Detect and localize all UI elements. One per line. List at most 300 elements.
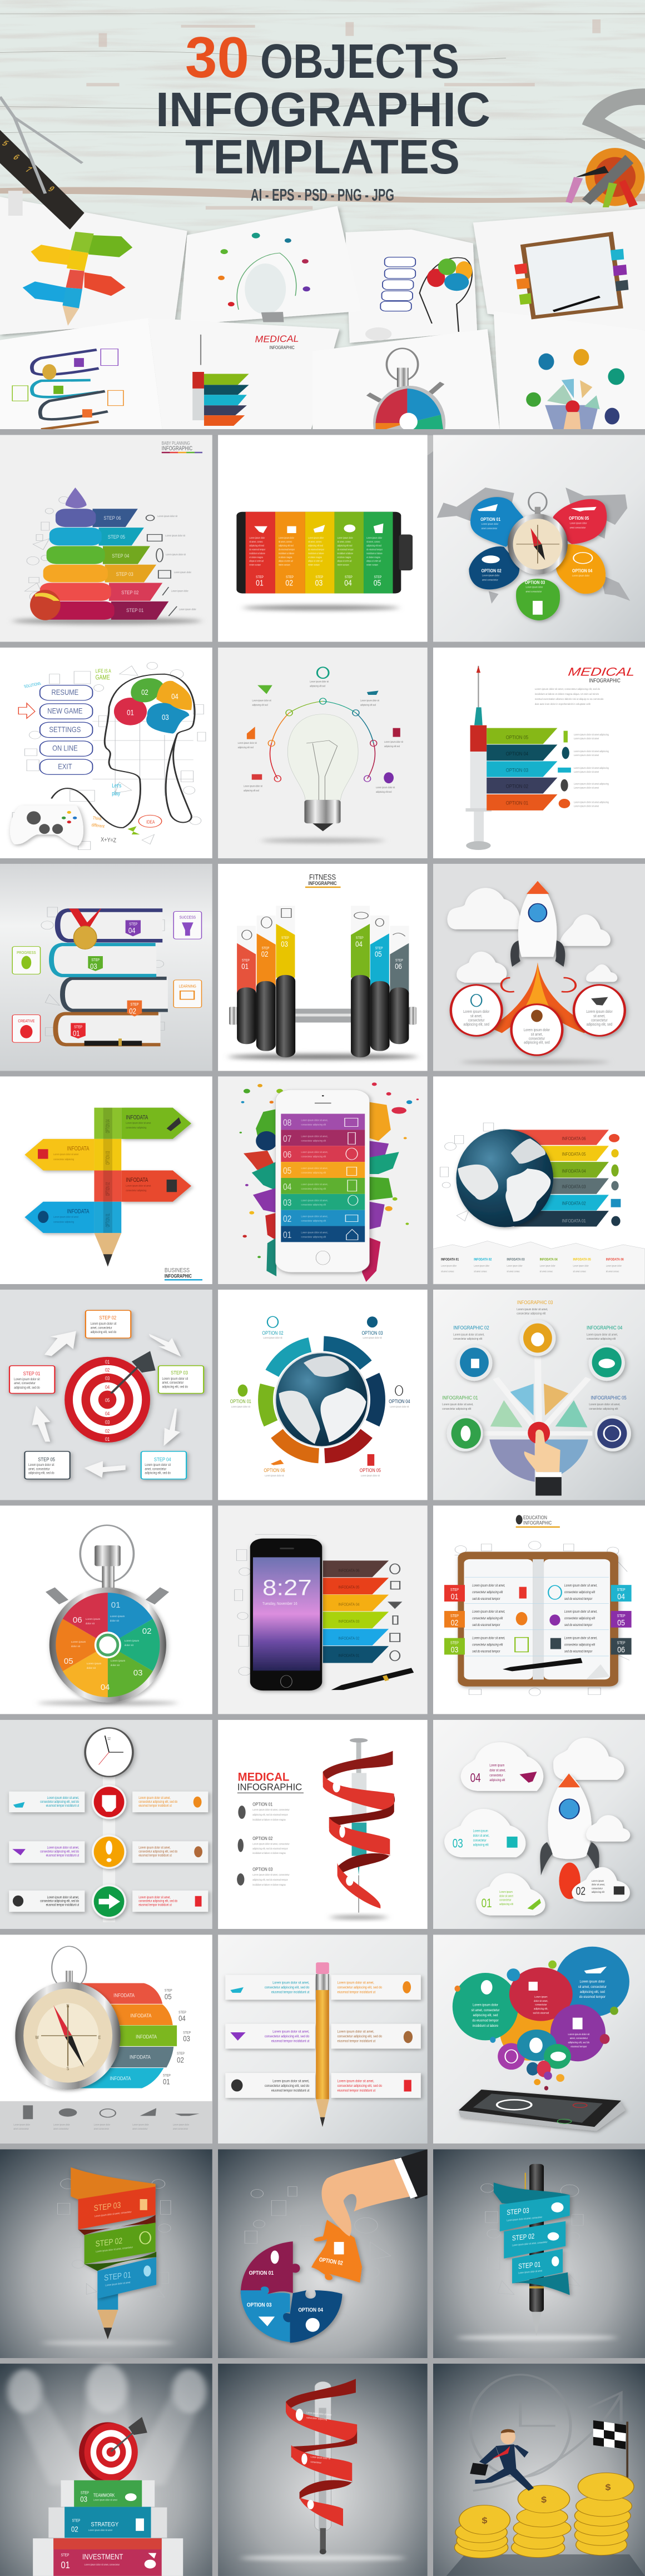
intro text: nostrud exercitation ullamco laboris nisi ut aliquip ex ea commodo [535, 698, 604, 700]
ribbon labels: STEP 02 [96, 2236, 122, 2249]
tool: ruler and compass [0, 97, 85, 230]
panel: ribbon pencil: Lorem ipsum dolor sit amet [105, 2281, 131, 2287]
paint splashes [240, 1082, 419, 1282]
heading: FITNESS [309, 872, 336, 882]
stair labels: Lorem ipsum dolor sit amet [88, 2528, 113, 2532]
panel: dart target steps: amet, consectetur [162, 1381, 183, 1385]
iphone [250, 1539, 322, 1690]
thermometer [315, 2381, 331, 2554]
tool: ruler and compass: 6 [11, 153, 22, 161]
ring segments [243, 1321, 400, 1478]
pencil: OPTION 04 [105, 1120, 111, 1133]
battery cells: incididunt ut labore [366, 551, 383, 555]
option labels: OPTION 03 [247, 2302, 271, 2309]
bars [323, 1560, 389, 1663]
panel: phone with paint splashes [218, 1076, 428, 1284]
panel: light bulb arc: Lorem ipsum dolor sit [238, 742, 257, 744]
transport footer: amet consectetur [13, 2127, 29, 2130]
panel: rocket with circles: consectetur [529, 1037, 545, 1041]
card text: eiusmod tempor incididunt ut [138, 1903, 172, 1907]
panel: medical syringe: Lorem ipsum dolor sit amet adipiscing [574, 733, 609, 736]
infodata labels: INFODATA [126, 1114, 148, 1121]
connector [103, 1774, 115, 1922]
cloud labels: 01 [482, 1897, 492, 1911]
step labels: STEP [165, 1989, 172, 1993]
step labels [163, 1989, 191, 2086]
rocket [540, 1773, 599, 1875]
footer columns [441, 1258, 624, 1262]
panel: hand pressing button: consectetur adipiscing elit [517, 1312, 546, 1316]
panel: rocket with clouds: Lorem ipsum [592, 1879, 604, 1882]
pie: Lorem ipsum [110, 1615, 125, 1618]
ribbon labels: STEP 03 [94, 2200, 121, 2213]
medal [69, 909, 101, 949]
panel: hand pressing button: Lorem ipsum dolor sit amet, [587, 1333, 618, 1337]
option labels: OPTION 02 [319, 2256, 344, 2267]
panel: globe ring arrows: Lorem ipsum dolor sit [265, 1474, 284, 1477]
card text: eiusmod tempor incididunt ut [338, 1991, 375, 1995]
panel: rocket with circles: adipiscing elit, sed [587, 1022, 613, 1027]
stair labels: INVESTMENT [82, 2552, 123, 2561]
card text: eiusmod tempor incididunt ut [271, 2089, 310, 2093]
card text: eiusmod tempor incididunt ut [46, 1854, 79, 1858]
bars: INFODATA [110, 2075, 131, 2081]
globe [456, 1129, 553, 1227]
panel: dart target steps: 02 [105, 1367, 110, 1373]
option labels: OPTION 06 [264, 1468, 285, 1473]
card text: Lorem ipsum dolor sit amet, [338, 2080, 374, 2083]
notebook text: consectetur adipiscing elit [564, 1591, 595, 1594]
panel: pencil signpost: consectetur adipiscing [126, 1126, 147, 1129]
step labels: STEP 02 [121, 589, 138, 595]
panel: game head: RESUME [52, 688, 78, 697]
battery cells: do eiusmod tempor [249, 548, 266, 551]
petal labels: OPTION 05 [569, 515, 589, 521]
step tags: 01 [73, 1028, 80, 1038]
exhaust plume [489, 962, 594, 1033]
option labels [247, 2256, 344, 2314]
panel: globe ring arrows: Lorem ipsum dolor sit [390, 1405, 409, 1408]
petal labels: OPTION 02 [482, 568, 502, 574]
bubble text: amet, consectetur [570, 2037, 588, 2040]
hero title: 30 [185, 26, 249, 90]
intro text: duis aute irure dolor in reprehenderit in voluptate velit [535, 703, 591, 705]
panel: hand pressing button: consectetur adipiscing elit [589, 1407, 618, 1411]
panel: rocket with clouds: Lorem ipsum [489, 1764, 505, 1768]
battery cells: aliqua ut enim ad [249, 559, 264, 563]
options: OPTION 03 [252, 1867, 272, 1872]
heading [162, 440, 202, 453]
battery cells: incididunt ut labore [338, 551, 354, 555]
card text: Lorem ipsum dolor sit amet, [138, 1896, 171, 1899]
battery cells: et dolore magna [366, 555, 380, 559]
panel: light bulb arc: Lorem ipsum dolor sit [384, 740, 404, 743]
panel: compass petals on world map: Lorem ipsum dolor [572, 574, 590, 577]
option labels [230, 1330, 410, 1473]
notebook text: Lorem ipsum dolor sit amet, [472, 1584, 505, 1588]
phone bars [281, 1114, 365, 1242]
transport footer [0, 2101, 212, 2144]
panel: globe with bars [433, 1076, 645, 1284]
battery cells: Lorem ipsum dolor [249, 536, 265, 539]
panel: dart target steps: adipiscing elit, sed do [145, 1471, 171, 1475]
battery cells: 03 [315, 578, 322, 588]
heading [237, 1771, 304, 1793]
infodata labels: INFODATA [126, 1177, 148, 1183]
battery cells: adipiscing elit sed [308, 544, 323, 547]
cloud labels: 03 [453, 1837, 463, 1851]
panel: businessman on coins: $ [605, 2482, 611, 2493]
bars [70, 1983, 177, 2088]
phone bars: 03 [283, 1198, 291, 1209]
option bars: OPTION 05 [506, 734, 528, 740]
coin stacks [454, 2473, 634, 2558]
panel: game head: NEW GAME [47, 706, 83, 715]
pie: 02 [142, 1627, 151, 1636]
mini: medical syringe [192, 333, 299, 426]
battery cells: aliqua ut enim ad [366, 559, 381, 563]
pie: dolor sit [125, 1644, 134, 1647]
panel: books stack: PROGRESS [17, 951, 36, 955]
battery cells: Lorem ipsum dolor [308, 536, 324, 539]
panel: light bulb arc: adipiscing elit sed [238, 746, 254, 749]
ribbon [286, 2379, 357, 2526]
panel: rocket with clouds: dolor sit amet [499, 1894, 513, 1898]
panel: fitness dumbbell: 04 [355, 939, 363, 948]
bars: INFODATA 03 [562, 1184, 586, 1190]
panel: pen with ribbon: Lorem ipsum dolor sit amet [518, 2269, 543, 2274]
panel: education notebook: STEP [450, 1614, 459, 1618]
bubble text: sit amet, consectetur [578, 1985, 607, 1989]
heading: INFOGRAPHIC [162, 445, 192, 452]
doodle notes: X+Y=Z [101, 837, 116, 844]
bubble text: sed do eiusmod [533, 2011, 549, 2015]
option labels: OPTION 01 [230, 1399, 251, 1404]
footer columns: INFODATA 06 [606, 1258, 624, 1262]
card text: eiusmod tempor incididunt ut [271, 2040, 310, 2043]
panel: dart target steps: amet, consectetur [28, 1468, 50, 1471]
panel: rocket with clouds: dolor sit amet, [592, 1883, 605, 1886]
battery cells: adipiscing elit sed [366, 544, 381, 547]
panel: light bulb arc: adipiscing elit sed [244, 789, 260, 792]
stair labels: Lorem ipsum dolor sit amet [93, 2498, 118, 2502]
battery cells: aliqua ut enim ad [308, 559, 322, 563]
battery cells: do eiusmod tempor [308, 548, 325, 551]
pencil: OPTION 01 [105, 1214, 111, 1227]
panel: light bulb arc: Lorem ipsum dolor sit [252, 699, 271, 702]
petal labels: OPTION 04 [572, 568, 593, 574]
panel: fitness dumbbell: 05 [375, 949, 382, 958]
panel: pencil signpost: Lorem ipsum dolor sit amet [53, 1153, 79, 1156]
panel: medical ribbon syringe [218, 1720, 428, 1929]
compass: W [36, 2035, 39, 2040]
infodata labels: INFODATA [67, 1209, 90, 1215]
panel: dart target steps: STEP 05 [38, 1456, 55, 1463]
battery cells: STEP [286, 576, 294, 579]
intro text: Lorem ipsum dolor sit amet, consectetur adipiscing elit, sed do [535, 688, 600, 690]
battery cells: sit amet, consec [249, 540, 263, 543]
ribbon [494, 2182, 570, 2295]
step labels [103, 515, 143, 613]
lock screen text: Tuesday, November 16 [262, 1602, 297, 1606]
mini: notebook [514, 232, 628, 319]
battery cells: et dolore magna [308, 555, 322, 559]
panel: thermometer ribbon [218, 2364, 428, 2576]
panel: fitness dumbbell: 06 [395, 962, 402, 971]
card text: consectetur adipiscing elit, sed do [265, 2085, 310, 2088]
panel: rocket with circles: sit amet, [470, 1015, 483, 1018]
options [237, 1802, 290, 1886]
heading notes: SOLUTIONS [23, 682, 42, 689]
bars: INFODATA [130, 2054, 151, 2060]
panel: education notebook: 03 [451, 1645, 458, 1654]
syringe [465, 666, 492, 850]
panel: light bulb arc: Lorem ipsum dolor sit [244, 784, 263, 788]
panel: compass petals on world map: amet consectetur [570, 526, 586, 529]
panel: medical syringe: Lorem ipsum dolor sit amet adipiscing [574, 782, 609, 785]
card text: Lorem ipsum dolor sit amet, [338, 1981, 374, 1985]
battery cells: Lorem ipsum dolor [279, 536, 294, 539]
panel: light bulb arc: adipiscing elit sed [310, 684, 326, 688]
mini: light bulb [218, 233, 310, 322]
bars: INFODATA 05 [338, 1585, 360, 1590]
notebook text: sed do eiusmod tempor [564, 1623, 593, 1627]
bubble text: incididunt ut labore [473, 2024, 499, 2028]
stair labels: STEP [81, 2491, 89, 2495]
panel: fitness dumbbell: STEP [395, 959, 403, 963]
bars: INFODATA [113, 1992, 135, 1998]
panel: rocket with clouds: adipiscing elit [473, 1843, 489, 1847]
weights [237, 975, 409, 1057]
pencil [316, 1962, 329, 2127]
card text: consectetur adipiscing elit, sed do [338, 2035, 383, 2038]
panel: dart target steps: 01 [105, 1359, 110, 1365]
ribbon labels: STEP 02 [512, 2232, 534, 2242]
heading [567, 666, 636, 684]
heading: MEDICAL [567, 666, 636, 679]
transport footer: Lorem ipsum dolor [13, 2123, 30, 2126]
cloud labels: 02 [576, 1884, 586, 1897]
intro text: incididunt ut labore et dolore magna aliqua. Ut enim ad minim [535, 693, 599, 695]
phone bars: consectetur adipiscing elit [301, 1171, 326, 1174]
panel: dart target steps: Lorem ipsum dolor sit [145, 1463, 171, 1467]
infographic labels: INFOGRAPHIC 04 [587, 1325, 623, 1331]
stair labels: TEAMWORK [93, 2493, 115, 2498]
panel: compass petals on world map: Lorem ipsum dolor [482, 574, 500, 577]
panel: rocket with clouds: consectetur [473, 1839, 487, 1843]
step tags: STEP [91, 958, 100, 962]
bars: INFODATA 04 [338, 1603, 360, 1607]
infodata labels: INFODATA [67, 1146, 90, 1152]
battery cells: sit amet, consec [366, 540, 380, 543]
battery cells: adipiscing elit sed [338, 544, 352, 547]
panel: rocket with circles: Lorem ipsum dolor [524, 1028, 550, 1032]
panel: education notebook: 05 [617, 1618, 625, 1627]
panel: compass with bars [0, 1935, 212, 2144]
crown [50, 1525, 165, 1602]
pie: Lorem ipsum [71, 1640, 86, 1643]
panel: baby planning stack: Lorem ipsum dolor [171, 589, 188, 593]
intro text [535, 688, 604, 705]
card text: Lorem ipsum dolor sit amet, [138, 1797, 171, 1800]
panel: dart target steps: adipiscing elit, sed do [14, 1386, 40, 1390]
panel: rocket with clouds: consectetur [499, 1898, 512, 1902]
notebook text: Lorem ipsum dolor sit amet, [564, 1610, 597, 1614]
bubble text: adipiscing elit, sed [580, 1990, 605, 1994]
options: OPTION 01 [252, 1802, 272, 1807]
ribbon: consectetur adipiscing [306, 2416, 328, 2421]
hero title: TEMPLATES [185, 130, 460, 184]
infographic labels: INFOGRAPHIC 02 [453, 1325, 489, 1331]
doodle notes: play [112, 790, 121, 797]
card text: Lorem ipsum dolor sit amet, [47, 1797, 79, 1800]
spokes [483, 1353, 592, 1434]
infographic labels [442, 1299, 627, 1401]
panel: dart target steps: adipiscing elit, sed do [91, 1331, 116, 1334]
phone bars: Lorem ipsum dolor sit amet, [301, 1199, 328, 1202]
panel: fitness dumbbell: STEP [242, 959, 250, 963]
panel: rocket with circles [433, 864, 645, 1071]
option buttons [446, 1320, 631, 1451]
hero title [156, 26, 490, 184]
panel: rocket with clouds: Lorem ipsum [499, 1890, 513, 1894]
bubbles [453, 1947, 629, 2090]
panel: medical syringe [433, 648, 645, 858]
option labels: OPTION 02 [262, 1330, 284, 1336]
heading: MEDICAL [238, 1771, 290, 1784]
tool: protractor [582, 88, 645, 150]
heading: INFOGRAPHIC [237, 1782, 302, 1793]
head outline and cable [51, 674, 195, 828]
pie: Lorem ipsum [111, 1659, 125, 1662]
options: OPTION 02 [252, 1836, 272, 1841]
side cards [12, 911, 202, 1042]
panel: pen with ribbon [433, 2149, 645, 2358]
panel: dart target steps: 02 [105, 1429, 110, 1434]
pen [331, 1668, 414, 1690]
options: adipiscing elit, sed do eiusmod tempor [252, 1813, 288, 1816]
ribbon labels [94, 2200, 131, 2282]
bubble text: Lorem ipsum dolor sit [568, 2033, 590, 2036]
businessman [470, 2429, 534, 2491]
panel: light bulb arc: Lorem ipsum dolor sit [376, 786, 395, 789]
bubble text: adipiscing elit, sed [473, 2013, 498, 2017]
notebook text: sed do eiusmod tempor [564, 1650, 593, 1654]
panel: globe ring arrows: Lorem ipsum dolor sit [361, 1474, 380, 1477]
heading: BABY PLANNING [162, 440, 190, 446]
battery cells: STEP [315, 576, 323, 579]
panel: rocket with clouds: adipiscing elit [489, 1778, 505, 1782]
panel: rocket with clouds: consectetur [592, 1887, 603, 1889]
stair labels: STEP [61, 2553, 69, 2558]
card text: Lorem ipsum dolor sit amet, [47, 1896, 79, 1899]
bar [229, 1007, 416, 1025]
puzzle pieces [241, 2220, 362, 2343]
step labels: STEP [178, 2011, 186, 2015]
bar icons [389, 1564, 401, 1660]
option icons [558, 731, 571, 808]
transport footer: Lorem ipsum dolor [173, 2123, 190, 2126]
bars: INFODATA 06 [338, 1569, 360, 1573]
battery cells: STEP [374, 576, 381, 579]
bars: INFODATA 01 [562, 1218, 586, 1224]
battery cells: minim veniam [366, 563, 379, 566]
panel: dart target steps: Lorem ipsum dolor sit [28, 1463, 54, 1467]
panel: hand pressing button: Lorem ipsum dolor sit amet, [589, 1403, 620, 1406]
panel: education notebook: STEP [617, 1641, 626, 1645]
panel: hand pressing button: Lorem ipsum dolor sit amet, [453, 1333, 484, 1337]
panel: pencil with cards [218, 1935, 428, 2144]
battery cells: do eiusmod tempor [338, 548, 354, 551]
battery cells: Lorem ipsum dolor [338, 536, 353, 539]
battery cells [246, 512, 393, 593]
mini: pencil signpost [23, 232, 132, 326]
panel: dart target steps: 01 [105, 1436, 110, 1442]
step icons and notes [146, 515, 177, 616]
notebook text: Lorem ipsum dolor sit amet, [564, 1584, 597, 1588]
panel: baby planning stack [0, 435, 212, 641]
battery cells: 04 [344, 578, 352, 588]
syringe [330, 1738, 388, 1919]
card text: consectetur adipiscing elit, sed do [265, 2035, 310, 2038]
footer columns: INFODATA 01 [441, 1258, 459, 1262]
panel: compass petals on world map [433, 435, 645, 641]
watch case [49, 1588, 166, 1703]
panel: globe ring arrows: Lorem ipsum dolor sit [363, 1336, 382, 1339]
battery cells: incididunt ut labore [279, 551, 295, 555]
panel: rocket with clouds: Lorem ipsum [473, 1829, 488, 1833]
flag [593, 2420, 627, 2484]
bars: INFODATA 02 [338, 1637, 360, 1641]
stair labels: STEP [72, 2519, 80, 2523]
bars: INFODATA 06 [562, 1136, 586, 1141]
panel: hand pressing button: consectetur adipiscing elit [442, 1407, 472, 1411]
panel: compass petals on world map: Lorem ipsum dolor [525, 585, 543, 589]
card text: eiusmod tempor incididunt ut [46, 1804, 79, 1808]
panel: globe with bars: sit amet consec [573, 1270, 586, 1273]
footer columns: INFODATA 04 [540, 1258, 558, 1262]
notebook text: Lorem ipsum dolor sit amet, [472, 1637, 505, 1640]
panel: education notebook: STEP [450, 1588, 459, 1592]
panel: baby planning stack: Lorem ipsum dolor [179, 608, 196, 610]
pie: 06 [73, 1615, 82, 1625]
panel: pencil signpost: Lorem ipsum dolor sit amet [126, 1184, 151, 1187]
panel: dart target steps: adipiscing elit, sed do [28, 1471, 54, 1475]
card text [265, 1981, 383, 2093]
panel: books stack [0, 864, 212, 1071]
panel: rocket with circles: consectetur [591, 1018, 608, 1023]
phone bars: consectetur adipiscing elit [301, 1155, 326, 1158]
panel: light bulb arc: Lorem ipsum dolor sit [360, 699, 380, 702]
heading notes: LIFE IS A [96, 668, 111, 674]
step tags: STEP [129, 922, 137, 927]
bubble text: eiusmod tempor [570, 2045, 587, 2048]
stair labels: 02 [71, 2524, 78, 2534]
petal labels: OPTION 03 [525, 580, 545, 585]
cloud labels: 04 [470, 1771, 481, 1785]
lock screen text [262, 1575, 312, 1606]
pencil: OPTION 03 [105, 1151, 111, 1165]
panel: dart target steps: STEP 03 [171, 1370, 188, 1376]
bars: INFODATA 04 [562, 1168, 586, 1174]
panel: globe with bars: Lorem ipsum dolor [606, 1264, 622, 1267]
stair labels: 01 [61, 2560, 70, 2570]
panel: dart target steps: Lorem ipsum dolor sit [162, 1377, 188, 1381]
pencil: OPTION 02 [105, 1182, 111, 1196]
card text: consectetur adipiscing elit, sed do [40, 1801, 79, 1804]
panel: compass petals on world map: Lorem ipsum dolor [482, 523, 499, 525]
mini: medical syringe: MEDICAL [255, 333, 299, 345]
